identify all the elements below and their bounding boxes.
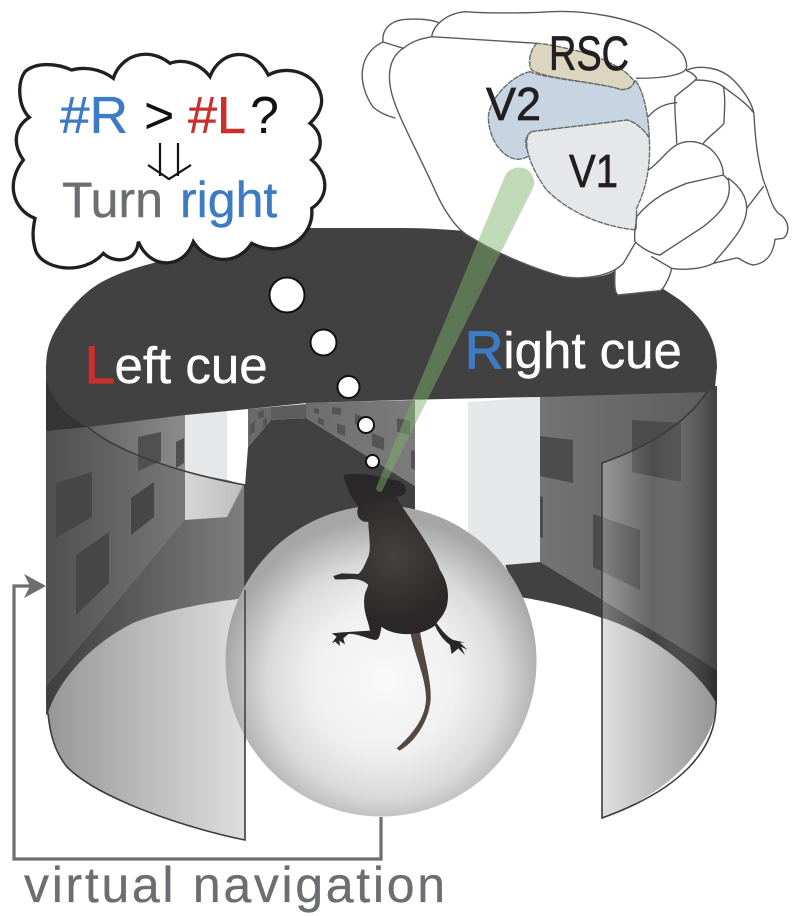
left visual cue [185, 409, 248, 520]
left cue label: L [85, 336, 114, 395]
virtual navigation feedback arrow [14, 574, 381, 859]
cap: top of the drum [46, 228, 717, 427]
right visual cue [415, 397, 540, 640]
mouse body [332, 474, 468, 655]
right wall [540, 386, 717, 670]
secondary visual region V2 [488, 72, 649, 159]
brain white silhouette [362, 11, 788, 295]
green projection beam [376, 167, 534, 492]
cloud text: decision: Turn [62, 172, 163, 228]
label V1: V1 [569, 145, 618, 197]
corridor floor [245, 418, 470, 640]
left shadow corner [46, 378, 88, 431]
cloud text: question: #R [60, 87, 128, 145]
left wall squares [56, 432, 184, 615]
cloud text: question: > [144, 87, 174, 145]
left panel front edge over sphere [244, 590, 246, 742]
thought cloud [13, 54, 325, 268]
caption: virtual navigation: virtual navigation [24, 857, 445, 913]
right cue label: ight cue [503, 322, 682, 379]
left cue label: eft cue [114, 337, 268, 394]
corridor walls [248, 400, 415, 486]
see-through back wall above left panel [88, 415, 185, 472]
brain contour lines [362, 11, 788, 295]
cloud text: question: #L [188, 87, 246, 145]
right wall squares [540, 420, 681, 590]
thought bubbles [270, 278, 379, 468]
left floor [46, 486, 245, 715]
trackball sphere [226, 506, 536, 816]
primary visual region V1 [527, 120, 650, 230]
right cue label: R [465, 321, 503, 380]
panel outline strokes [48, 392, 716, 840]
cloud text: decision: right [180, 172, 277, 228]
retrosplenial region RSC [530, 43, 634, 89]
label RSC: RSC [549, 28, 629, 81]
brain atlas outline [362, 11, 788, 295]
mouse [332, 474, 468, 751]
left lower panel [48, 598, 245, 840]
drum: virtual reality arena [46, 228, 717, 840]
right floor [505, 562, 717, 705]
label V2: V2 [486, 78, 541, 130]
mouse tail [397, 625, 431, 751]
right panel tint [602, 386, 717, 705]
right lower panel [602, 618, 716, 818]
cloud double arrow [148, 143, 191, 179]
cloud text: question [60, 87, 279, 145]
left wall base [46, 370, 245, 715]
cloud text: question: ? [250, 87, 279, 145]
